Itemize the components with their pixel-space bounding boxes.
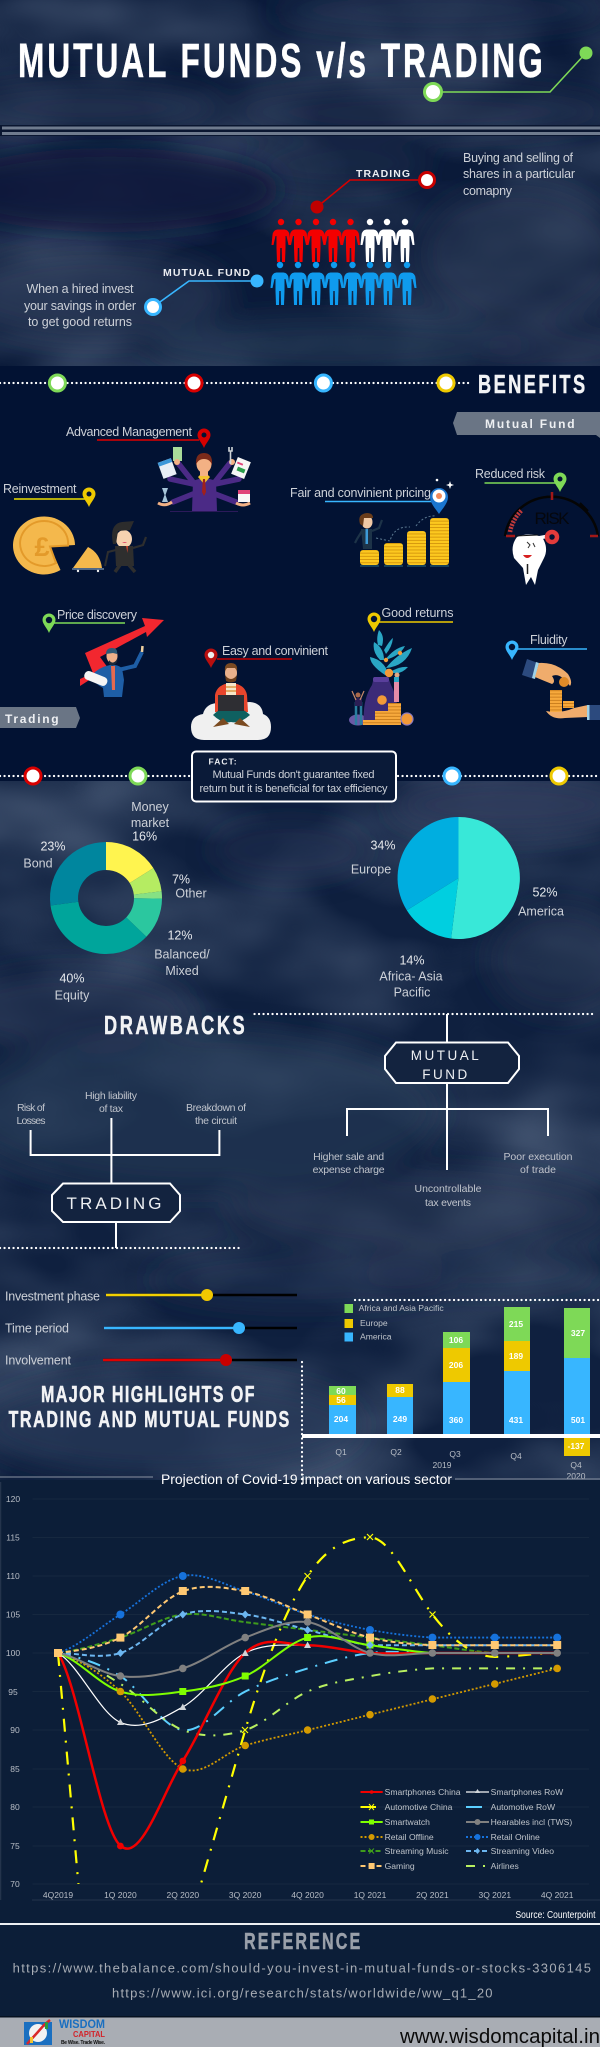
benefit: reduced risk: Reduced risk <box>475 467 546 481</box>
pie labels: America <box>518 904 564 918</box>
chart axes and grid: 3Q 2020 <box>229 1890 262 1900</box>
dark band behind benefits <box>0 366 600 781</box>
diagram: mutual fund drawbacks: FUND <box>422 1067 470 1082</box>
chart legend: Streaming Video <box>491 1846 554 1856</box>
bar chart: quarterly flows <box>302 1300 600 1484</box>
icon: risk gauge with tooth character <box>505 492 598 585</box>
heading: major highlights <box>8 1382 289 1433</box>
pie labels: 14% <box>399 954 425 968</box>
diagram: trading drawbacks: of tax <box>99 1103 124 1115</box>
bar chart: quarterly flows: America <box>360 1332 392 1342</box>
chart axes and grid: 2Q 2020 <box>166 1890 199 1900</box>
bar chart: quarterly flows: 204 <box>334 1414 348 1424</box>
chart axes and grid: 75 <box>10 1841 20 1851</box>
pie labels: Pacific <box>394 986 430 1000</box>
benefit: easy and convinient: Easy and convinient <box>222 644 329 658</box>
callout: fact: FACT: <box>208 756 238 766</box>
chart axes and grid: 115 <box>6 1532 20 1542</box>
chart axes and grid: 4Q 2021 <box>541 1890 574 1900</box>
benefit: fluidity: Fluidity <box>530 633 568 647</box>
callout: fact: Mutual Funds don't guarantee fixed <box>212 769 374 781</box>
benefit: good returns: Good returns <box>382 606 454 620</box>
chart axes and grid: 95 <box>8 1687 18 1697</box>
donut labels: 23% <box>40 840 66 854</box>
chart axes and grid: 70 <box>10 1879 20 1889</box>
callout: mutual fund <box>146 267 264 314</box>
chart legend: Automotive RoW <box>491 1802 556 1812</box>
donut labels: Balanced/ <box>154 948 210 962</box>
line chart: covid-19 projection <box>1 1482 600 1907</box>
bar chart: quarterly flows: Q4 <box>570 1460 582 1470</box>
slider: involvement: Involvement <box>5 1354 72 1368</box>
diagram: trading drawbacks: the circuit <box>195 1115 237 1127</box>
tag: trading: Trading <box>5 712 60 726</box>
icon: person on cloud with laptop <box>191 663 271 740</box>
chart axes and grid: 80 <box>10 1802 20 1812</box>
bar chart: quarterly flows: Q4 <box>510 1451 522 1461</box>
logo: wisdom capital <box>24 2019 106 2046</box>
diagram: mutual fund drawbacks: Uncontrollable <box>414 1183 482 1195</box>
people: mutual fund row <box>270 262 416 305</box>
reference urls: https://www.thebalance.com/should-you-invest-in-mutual-funds-or-stocks-3306145 <box>13 1960 591 1976</box>
bar chart: quarterly flows: 431 <box>509 1415 523 1425</box>
diagram: trading drawbacks: Breakdown of <box>186 1102 246 1114</box>
bar chart: quarterly flows: 501 <box>571 1415 585 1425</box>
text: mutual fund definition: When a hired invest <box>26 282 134 296</box>
chart legend <box>360 1787 572 1871</box>
bar chart: quarterly flows: 60 <box>336 1386 346 1396</box>
donut labels: market <box>131 816 170 830</box>
bar chart: quarterly flows: Europe <box>360 1318 388 1328</box>
slider: time period <box>5 1322 297 1336</box>
slider: time period: Time period <box>5 1322 69 1336</box>
chart legend: Smartphones RoW <box>491 1787 564 1797</box>
icon: coin stacks and man <box>355 513 449 566</box>
icon: money bag plant <box>349 630 413 726</box>
bar chart: quarterly flows: 88 <box>395 1385 405 1395</box>
drawbacks dotted divider <box>254 1013 595 1015</box>
logo: wisdom capital: Be Wise. Trade Wise. <box>61 2040 106 2046</box>
logo: wisdom capital: CAPITAL <box>73 2029 105 2039</box>
text: trading definition <box>463 151 575 198</box>
chart legend: Smartwatch <box>385 1817 430 1827</box>
bar chart: quarterly flows: Q2 <box>390 1447 402 1457</box>
icon: hand placing coins <box>522 659 600 720</box>
benefit: advanced management: Advanced Management <box>66 425 193 439</box>
chart axes and grid: 90 <box>10 1725 20 1735</box>
pie labels: Europe <box>351 862 391 876</box>
diagram: mutual fund drawbacks: MUTUAL <box>411 1048 481 1063</box>
chart markers <box>54 1534 561 1849</box>
chart legend: Gaming <box>385 1861 415 1871</box>
donut labels: 16% <box>132 830 157 844</box>
reference urls: https://www.ici.org/research/stats/worldwide/ww_q1_20 <box>112 1986 492 2000</box>
donut chart: asset allocation <box>50 842 162 954</box>
double divider <box>0 125 600 136</box>
dark band behind chart and references <box>0 1480 600 2017</box>
bar chart: quarterly flows: 2020 <box>567 1471 586 1481</box>
donut labels: Other <box>175 886 207 900</box>
donut labels: Mixed <box>165 964 199 978</box>
heading: major highlights: TRADING AND MUTUAL FUNDS <box>8 1407 289 1433</box>
donut labels: 7% <box>172 872 190 886</box>
chart legend: Retail Offline <box>385 1832 434 1842</box>
tag: mutual fund: Mutual Fund <box>485 417 576 431</box>
slider: investment phase <box>5 1289 297 1304</box>
diagram: mutual fund drawbacks: Poor execution <box>504 1151 573 1163</box>
text: trading definition: comapny <box>463 184 513 198</box>
bar chart: quarterly flows: 2019 <box>433 1460 452 1470</box>
references divider <box>0 1923 600 1925</box>
benefit: reinvestment <box>3 482 96 507</box>
bar chart: quarterly flows: 106 <box>449 1335 463 1345</box>
reference urls <box>13 1960 591 2000</box>
icon: manager with many arms <box>158 447 251 512</box>
callout: trading: TRADING <box>356 168 410 180</box>
logo: wisdom capital: WISDOM <box>59 2019 105 2031</box>
callout: trading <box>310 168 434 214</box>
diagram: mutual fund drawbacks: tax events <box>425 1197 471 1209</box>
diagram: mutual fund drawbacks: expense charge <box>313 1164 385 1176</box>
pie chart: regions <box>398 817 520 939</box>
icon: pound coin and businessman <box>13 516 146 574</box>
chart axes and grid: 105 <box>6 1610 20 1620</box>
chart legend: Airlines <box>491 1861 519 1871</box>
pie labels <box>351 838 564 1000</box>
heading: reference: REFERENCE <box>244 1929 360 1955</box>
icon: risk gauge with tooth character: RISK <box>534 509 570 528</box>
callout: fact: return but it is beneficial for tax efficiency <box>200 783 388 795</box>
chart axes and grid: 120 <box>6 1494 20 1504</box>
chart axes and grid: 110 <box>6 1571 20 1581</box>
chart axes and grid <box>1 1482 600 1900</box>
donut labels: Money <box>131 800 170 814</box>
chart axes and grid: 4Q 2020 <box>291 1890 324 1900</box>
chart legend: Automotive China <box>385 1802 453 1812</box>
cloud background: lower section <box>0 775 600 1480</box>
tag: trading <box>0 707 80 728</box>
footer bar <box>0 2016 600 2047</box>
pie labels: Africa- Asia <box>379 970 443 984</box>
donut labels: 12% <box>167 928 193 942</box>
benefit: price discovery <box>42 608 138 633</box>
heading: drawbacks: DRAWBACKS <box>104 1011 245 1040</box>
heading: major highlights: MAJOR HIGHLIGHTS OF <box>41 1382 254 1408</box>
text: trading definition: shares in a particular <box>463 167 575 181</box>
diagram: mutual fund drawbacks: of trade <box>520 1164 556 1176</box>
icon: pound coin and businessman: £ <box>34 532 50 562</box>
donut labels: Bond <box>23 856 53 870</box>
text: mutual fund definition: to get good returns <box>28 315 132 329</box>
chart axes and grid: 1Q 2021 <box>354 1890 387 1900</box>
bar chart: quarterly flows: -137 <box>567 1441 585 1451</box>
people: trading row <box>272 219 414 262</box>
benefit: reinvestment: Reinvestment <box>3 482 77 496</box>
chart legend: Smartphones China <box>385 1787 461 1797</box>
tag: mutual fund <box>453 412 600 438</box>
bar chart: quarterly flows: 56 <box>336 1395 346 1405</box>
donut labels: Equity <box>55 988 90 1002</box>
diagram: mutual fund drawbacks <box>313 1014 573 1209</box>
text: mutual fund definition: your savings in order <box>24 299 136 313</box>
chart axes and grid: 85 <box>10 1764 20 1774</box>
benefit: fair and convinient pricing <box>290 479 454 514</box>
heading: benefits: BENEFITS <box>478 370 585 399</box>
bar chart: quarterly flows: 360 <box>449 1415 463 1425</box>
diagram: trading drawbacks: Risk of <box>17 1102 45 1114</box>
diagram: trading drawbacks <box>16 1090 246 1248</box>
donut labels <box>23 800 210 1002</box>
chart axes and grid: 1Q 2020 <box>104 1890 137 1900</box>
benefit: advanced management <box>66 425 210 448</box>
chart series lines <box>58 1537 557 1907</box>
bar chart: quarterly flows: Africa and Asia Pacific <box>359 1303 444 1313</box>
slider: involvement <box>5 1354 297 1368</box>
donut labels: 40% <box>59 972 85 986</box>
benefit: reduced risk <box>475 467 566 492</box>
icon: red arrow and analyst <box>80 618 164 697</box>
cloud background: hero <box>0 0 600 375</box>
bar chart: quarterly flows: 215 <box>509 1319 523 1329</box>
bar chart: quarterly flows: Q1 <box>335 1447 347 1457</box>
title connector <box>424 46 592 100</box>
chart legend: Streaming Music <box>385 1846 449 1856</box>
chart axes and grid: 2Q 2021 <box>416 1890 449 1900</box>
bar chart: quarterly flows: 206 <box>449 1360 463 1370</box>
trading dotted divider <box>0 1247 239 1249</box>
pie labels: 52% <box>532 886 558 900</box>
text: mutual fund definition <box>24 282 136 329</box>
chart legend: Retail Online <box>491 1832 540 1842</box>
chart axes and grid: 3Q 2021 <box>478 1890 511 1900</box>
benefit: fair and convinient pricing: Fair and convinient pricing <box>290 486 431 500</box>
callout: mutual fund: MUTUAL FUND <box>163 267 250 279</box>
bar chart: quarterly flows: 327 <box>571 1328 585 1338</box>
benefit: price discovery: Price discovery <box>57 608 138 622</box>
chart axes and grid: 100 <box>6 1648 20 1658</box>
chart axes and grid: 4Q2019 <box>43 1890 73 1900</box>
bar chart: quarterly flows: 249 <box>393 1414 407 1424</box>
pie labels: 34% <box>370 838 396 852</box>
bar chart: quarterly flows: 189 <box>509 1351 523 1361</box>
callout: fact <box>192 752 396 802</box>
benefit: good returns <box>368 606 454 632</box>
benefits timeline <box>0 375 470 391</box>
bar chart: quarterly flows: Q3 <box>449 1449 461 1459</box>
benefit: fluidity <box>506 633 587 660</box>
title: MUTUAL FUNDS v/s TRADING <box>18 33 543 88</box>
text: trading definition: Buying and selling of <box>463 151 574 165</box>
diagram: trading drawbacks: TRADING <box>66 1194 162 1213</box>
diagram: trading drawbacks: Losses <box>16 1115 46 1127</box>
diagram: trading drawbacks: High liability <box>85 1090 138 1102</box>
benefit: easy and convinient <box>204 644 329 668</box>
slider: investment phase: Investment phase <box>5 1290 100 1304</box>
trading timeline <box>0 768 600 784</box>
chart legend: Hearables incl (TWS) <box>491 1817 572 1827</box>
chart title: Projection of Covid-19 impact on various sector <box>161 1472 453 1487</box>
diagram: mutual fund drawbacks: Higher sale and <box>313 1151 384 1163</box>
